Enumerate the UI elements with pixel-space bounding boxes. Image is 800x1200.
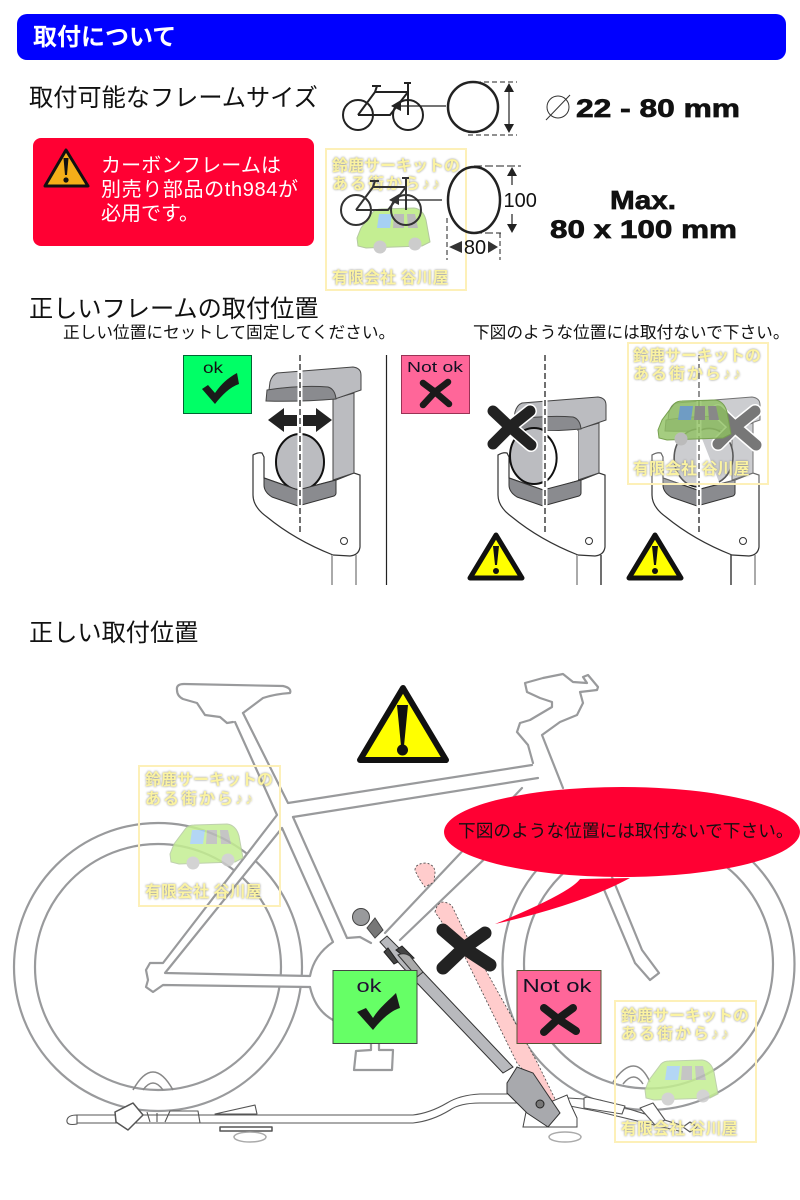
watermark: bicycle right <box>615 1001 756 1142</box>
heading: correct mount position: 正しい取付位置 <box>29 620 198 647</box>
callout: carbon frame warning: 必用です。 <box>101 202 199 225</box>
badge: ok: ok <box>203 360 224 377</box>
warning icon: left <box>470 535 522 578</box>
watermark: bicycle right: 有限会社 谷川屋 <box>621 1120 737 1138</box>
watermark: top: ある街から♪♪ <box>332 175 440 193</box>
clamp: wrong position left <box>493 355 606 585</box>
watermark: bicycle left: 鈴鹿サーキットの <box>145 771 273 789</box>
speech balloon: 下図のような位置には取付ないで下さい。 <box>458 821 794 841</box>
bicycle outline <box>14 674 794 1111</box>
header banner: 取付について <box>33 24 176 51</box>
clamp: wrong position right <box>652 355 760 585</box>
badge: not ok: Not ok <box>407 359 464 376</box>
diameter label <box>546 95 740 123</box>
icon: round frame size diagram <box>343 82 517 135</box>
badge: ok <box>184 356 252 414</box>
watermark: bicycle right: ある街から♪♪ <box>621 1025 729 1043</box>
icon: oval frame size diagram <box>341 166 537 260</box>
callout: carbon frame warning <box>33 138 314 246</box>
watermark: bicycle left: ある街から♪♪ <box>145 790 253 808</box>
caption: correct position: 正しい位置にセットして固定してください。 <box>63 323 395 342</box>
roof rack rail <box>67 1066 697 1142</box>
watermark: right: 有限会社 谷川屋 <box>633 460 749 478</box>
badge: not ok <box>402 356 470 414</box>
diameter label: 22 - 80 mm <box>576 95 740 123</box>
header banner <box>17 14 786 60</box>
callout: carbon frame warning: 別売り部品のth984が <box>101 178 298 201</box>
badge: large not ok: Not ok <box>522 976 593 996</box>
watermark: bicycle right: 鈴鹿サーキットの <box>621 1007 749 1025</box>
warning icon: right <box>629 535 681 578</box>
badge: large ok <box>333 970 417 1044</box>
badge: large ok: ok <box>356 976 383 996</box>
heading: frame size: 取付可能なフレームサイズ <box>29 85 318 112</box>
watermark: bicycle left: 有限会社 谷川屋 <box>145 883 261 901</box>
badge: large not ok <box>517 970 601 1044</box>
icon: oval frame size diagram: 80 <box>464 237 486 259</box>
callout: carbon frame warning: カーボンフレームは <box>101 154 281 177</box>
watermark: right: 鈴鹿サーキットの <box>633 347 761 365</box>
caption: wrong position: 下図のような位置には取付ないで下さい。 <box>473 323 790 342</box>
icon: black cross <box>443 930 490 968</box>
wrong mount ghost <box>415 863 558 1110</box>
watermark: top <box>326 149 466 290</box>
watermark: top: 鈴鹿サーキットの <box>332 157 460 175</box>
warning icon: large <box>360 688 446 760</box>
heading: correct frame position: 正しいフレームの取付位置 <box>29 296 319 323</box>
clamp: correct position <box>253 355 361 585</box>
max size label: 80 x 100 mm <box>550 216 737 244</box>
max size label <box>550 185 737 244</box>
watermark: right: ある街から♪♪ <box>633 365 741 383</box>
icon: oval frame size diagram: 100 <box>504 190 537 212</box>
roof rack arm <box>352 908 581 1142</box>
watermark: right <box>628 343 768 484</box>
watermark: top: 有限会社 谷川屋 <box>332 269 448 287</box>
max size label: Max. <box>610 185 676 215</box>
speech balloon <box>444 787 800 924</box>
divider <box>386 355 388 585</box>
watermark: bicycle left <box>139 766 280 906</box>
